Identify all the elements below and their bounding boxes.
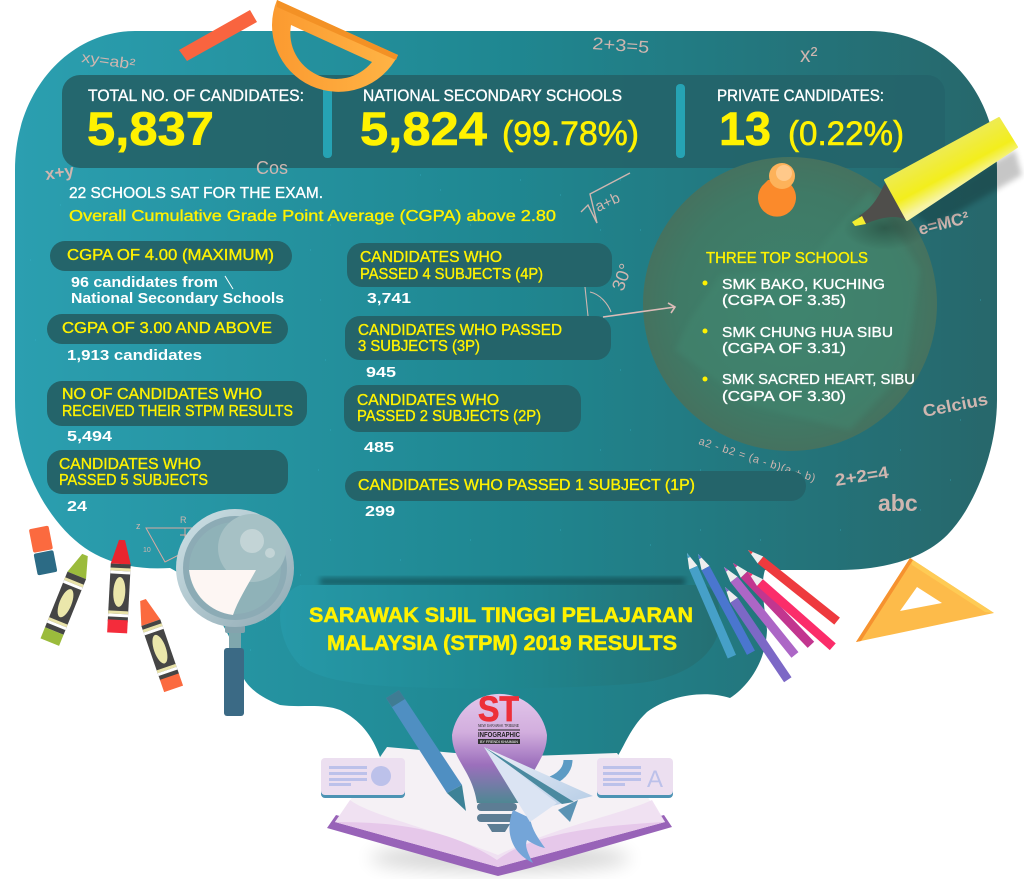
icon: left card — [321, 758, 405, 798]
icon: red crayon — [107, 539, 132, 633]
logo byline: BY FRENDI KHAIMAN — [480, 739, 518, 744]
stat: CGPA 4.00: National Secondary Schools — [71, 291, 284, 307]
stat: passed 5: 24 — [67, 499, 87, 515]
stat: received results: RECEIVED THEIR STPM RESULTS — [62, 403, 293, 420]
bullets — [702, 280, 708, 382]
stat: passed 4: 3,741 — [367, 291, 411, 307]
doodle: xy equation: xy=ab² — [80, 49, 136, 73]
stat: passed 1: 299 — [365, 504, 395, 520]
stat: CGPA 4.00: CGPA OF 4.00 (MAXIMUM) — [67, 247, 274, 264]
doodle: x squared: x² — [800, 44, 818, 67]
stat: CGPA 3.00: 1,913 candidates — [67, 348, 202, 364]
stat: passed 5: CANDIDATES WHO — [59, 456, 201, 473]
doodle: triangle — [136, 515, 232, 562]
national schools percent: (99.78%) — [502, 115, 639, 153]
schools sat: 22 SCHOOLS SAT FOR THE EXAM. — [69, 185, 323, 202]
logo ST: ST — [478, 690, 519, 729]
panel: three top schools: (CGPA OF 3.31) — [722, 340, 846, 357]
icon: right card — [597, 758, 673, 798]
separator one — [323, 84, 332, 158]
protractor — [272, 0, 398, 92]
stat: passed 4: CANDIDATES WHO — [360, 249, 502, 266]
icon: push pin — [758, 163, 796, 217]
private candidates percent: (0.22%) — [788, 115, 904, 153]
lower title shape: MALAYSIA (STPM) 2019 RESULTS — [327, 632, 677, 655]
stat: CGPA 4.00: 96 candidates from — [71, 275, 218, 291]
doodle: angle — [585, 261, 636, 316]
national schools label: NATIONAL SECONDARY SCHOOLS — [363, 87, 622, 105]
icon: set square — [856, 558, 994, 642]
stat: passed 5: PASSED 5 SUBJECTS — [59, 472, 208, 489]
speckles — [30, 175, 981, 680]
stat: passed 3: 945 — [366, 365, 396, 381]
icon: paper plane — [484, 747, 593, 863]
icon: light bulb logo — [452, 690, 568, 832]
doodle: 2+2=4: 2+2=4 — [834, 463, 891, 490]
icon: highlighter — [843, 118, 1022, 250]
stat: received results: 5,494 — [67, 429, 112, 445]
overall CGPA: Overall Cumulative Grade Point Average (CGPA) above 2.80 — [69, 208, 556, 225]
heading: THREE TOP SCHOOLS — [706, 250, 868, 267]
logo infographic label: INFOGRAPHIC — [478, 732, 520, 739]
doodle: algebra identity: a2 - b2 = (a - b)(a + b) — [697, 435, 817, 485]
doodle: Cos: Cos — [256, 158, 288, 178]
panel: three top schools — [643, 157, 937, 451]
national schools value: 5,824 — [360, 102, 487, 155]
icon: right card: A — [647, 766, 663, 793]
doodles — [44, 34, 990, 562]
icon: coloured pencils — [683, 546, 840, 682]
stat: received results: NO OF CANDIDATES WHO — [62, 386, 262, 403]
private candidates value: 13 — [719, 102, 771, 155]
doodle: abc: abc — [878, 490, 918, 516]
stat: CGPA 3.00 — [47, 314, 288, 364]
illustration: open book — [327, 747, 672, 876]
total candidates value: 5,837 — [87, 102, 214, 155]
total candidates label: TOTAL NO. OF CANDIDATES: — [88, 87, 304, 105]
separator two — [676, 84, 685, 158]
doodle: square root — [581, 173, 630, 223]
logo newspaper name: NEW SARAWAK TRIBUNE — [478, 723, 519, 728]
icon: eraser — [29, 526, 57, 575]
icon: magnifying glass — [176, 509, 294, 716]
stat: received results — [47, 381, 307, 445]
title text: SARAWAK SIJIL TINGGI PELAJARAN — [309, 604, 693, 627]
icon: blue pencil — [386, 690, 466, 811]
panel: three top schools: (CGPA OF 3.30) — [722, 388, 846, 405]
doodle: triangle: z — [136, 521, 141, 531]
icon: green crayon — [41, 551, 94, 646]
stat: passed 2: CANDIDATES WHO — [357, 392, 499, 409]
ruler — [179, 10, 257, 61]
panel: three top schools: (CGPA OF 3.35) — [722, 292, 846, 309]
doodle: triangle: R — [180, 515, 187, 525]
arrow to top schools — [603, 303, 675, 317]
stat: passed 3: 3 SUBJECTS (3P) — [358, 338, 480, 355]
stat: passed 2: 485 — [364, 440, 394, 456]
doodle: Celcius: Celcius — [921, 390, 990, 421]
stat: CGPA 3.00: CGPA OF 3.00 AND ABOVE — [62, 320, 272, 337]
summary lines — [69, 185, 556, 225]
stat: passed 3 — [345, 316, 611, 381]
stat: CGPA 4.00 — [50, 241, 292, 307]
school three: SMK SACRED HEART, SIBU — [722, 371, 915, 388]
icon: orange crayon — [134, 597, 183, 692]
private candidates label: PRIVATE CANDIDATES: — [717, 87, 884, 105]
stat: passed 2: PASSED 2 SUBJECTS (2P) — [357, 408, 541, 425]
stat: passed 4: PASSED 4 SUBJECTS (4P) — [360, 266, 543, 283]
stat: passed 3: CANDIDATES WHO PASSED — [358, 322, 562, 339]
doodle: triangle: 10 — [143, 547, 151, 554]
school one: SMK BAKO, KUCHING — [722, 276, 885, 293]
school two: SMK CHUNG HUA SIBU — [722, 324, 893, 341]
stat: passed 2 — [344, 385, 581, 456]
doodle: square root: a+b — [593, 189, 623, 216]
doodle: x+y: x+y — [44, 161, 76, 184]
stat: passed 4 — [347, 243, 612, 307]
doodle: angle: 30° — [608, 261, 636, 293]
stat: passed 1 — [345, 471, 806, 520]
doodle: e=mc2: e=MC² — [916, 208, 971, 239]
teal board background — [15, 31, 997, 761]
doodle: 2+3=5: 2+3=5 — [592, 34, 650, 57]
stat: passed 5 — [47, 450, 288, 515]
lower title shape — [280, 578, 720, 689]
stat: passed 1: CANDIDATES WHO PASSED 1 SUBJECT (1P) — [358, 477, 695, 494]
panel: headline totals — [62, 75, 945, 168]
